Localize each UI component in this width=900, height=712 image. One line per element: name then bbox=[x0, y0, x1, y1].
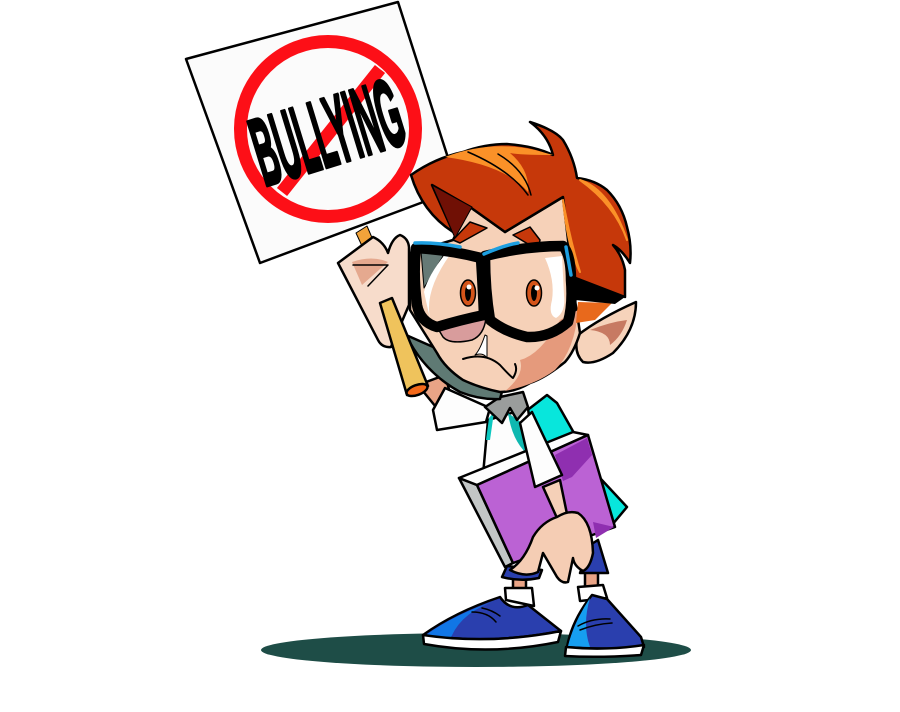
left eye bbox=[460, 280, 476, 306]
ground shadow bbox=[261, 633, 691, 667]
shoe highlight bbox=[426, 600, 498, 640]
hand bbox=[338, 235, 409, 347]
shoe upper bbox=[423, 597, 561, 639]
backpack top bbox=[525, 395, 574, 448]
left shoe bbox=[423, 597, 561, 650]
lower stick bbox=[380, 298, 428, 395]
prohibition slash bbox=[282, 69, 380, 192]
mouth bbox=[463, 357, 516, 378]
raised hand and stick bbox=[338, 235, 429, 398]
front arm and hand bbox=[510, 412, 593, 582]
right sock bbox=[578, 585, 607, 601]
teal strap left bbox=[486, 412, 494, 440]
book shadow top bbox=[555, 438, 592, 481]
sign text: BULLYING bbox=[240, 61, 416, 207]
teal strap right bbox=[508, 413, 527, 454]
neck shade bbox=[406, 335, 503, 399]
forearm bbox=[543, 480, 567, 518]
nose bbox=[437, 318, 486, 342]
legs bbox=[502, 540, 608, 606]
shirt body bbox=[483, 408, 535, 475]
left lens shine bbox=[424, 252, 452, 318]
backpack bbox=[525, 395, 627, 525]
book spine bbox=[459, 478, 513, 567]
inner ear bbox=[590, 320, 627, 345]
book shadow bottom bbox=[593, 522, 614, 538]
sleeve bbox=[433, 388, 490, 430]
nose line bbox=[475, 335, 487, 358]
glasses blue highlights bbox=[415, 243, 571, 275]
shoe crease bbox=[578, 619, 612, 630]
shoe sole bbox=[565, 645, 644, 657]
hair highlight bbox=[445, 146, 553, 192]
hair shadow bbox=[432, 185, 472, 238]
hair side highlight bbox=[563, 180, 627, 272]
hand bbox=[510, 512, 593, 582]
stick end bbox=[405, 382, 429, 398]
cheek shading bbox=[505, 310, 578, 391]
right leg bbox=[585, 570, 598, 588]
sign board bbox=[186, 2, 458, 263]
shoe sole bbox=[423, 631, 561, 650]
shoe crease bbox=[472, 608, 500, 622]
right shorts bbox=[580, 540, 608, 573]
book top pages bbox=[459, 432, 588, 485]
right eyebrow bbox=[513, 227, 540, 250]
right eye bbox=[526, 280, 542, 306]
back arm and sleeve bbox=[418, 375, 490, 430]
hair strand bbox=[468, 152, 531, 195]
shoe upper bbox=[567, 595, 644, 648]
glasses temple bbox=[573, 277, 625, 304]
left shorts bbox=[502, 566, 542, 580]
head bbox=[406, 122, 636, 399]
glasses bbox=[415, 246, 572, 337]
hand shading bbox=[352, 258, 388, 285]
shirt bbox=[483, 392, 535, 475]
sign bbox=[186, 2, 458, 263]
lens shine bbox=[545, 256, 564, 318]
sign stick top bbox=[356, 226, 373, 246]
face bbox=[410, 197, 580, 392]
left sock bbox=[505, 588, 534, 606]
right shoe bbox=[565, 595, 644, 657]
ear bbox=[576, 302, 636, 363]
lens glare bbox=[421, 251, 446, 288]
front sleeve bbox=[520, 412, 562, 487]
forearm bbox=[418, 375, 452, 412]
left leg bbox=[513, 575, 526, 591]
backpack bottom bbox=[600, 478, 627, 525]
finger line bbox=[353, 265, 388, 286]
collar bbox=[485, 392, 528, 423]
sideburn bbox=[576, 302, 612, 323]
prohibition ring bbox=[240, 42, 416, 216]
book bbox=[459, 432, 615, 567]
hair bbox=[411, 122, 631, 297]
book cover bbox=[477, 435, 615, 563]
shoe highlight bbox=[568, 598, 590, 647]
left eyebrow bbox=[453, 222, 487, 243]
